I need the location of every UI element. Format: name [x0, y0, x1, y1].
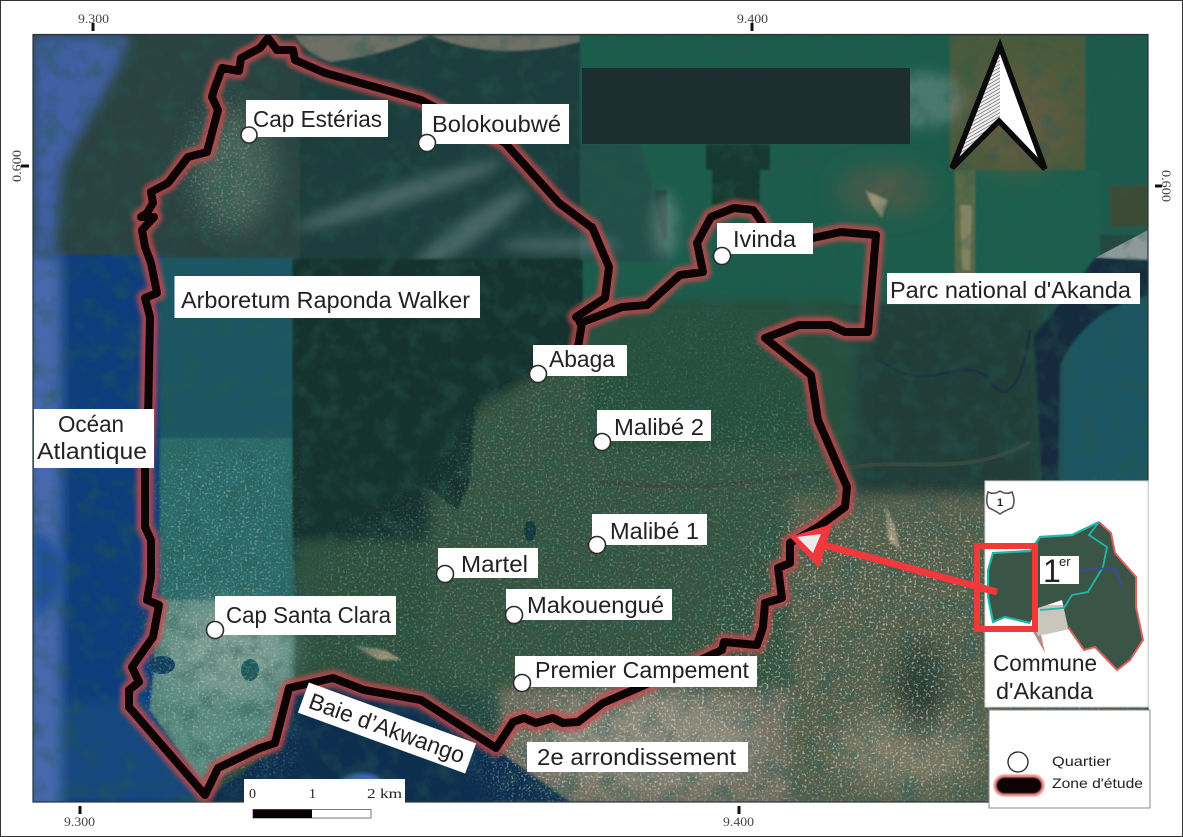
land areas: [296, 295, 1160, 815]
label: Océan Atlantique: [34, 409, 154, 468]
red selection square: [977, 546, 1035, 629]
geographic ticks and coordinates: 0.600: [9, 150, 24, 182]
label: 1er arrondissement: [1040, 553, 1079, 589]
geographic ticks and coordinates: 9.400: [723, 814, 754, 829]
legend: quartier: Quartier: [1052, 753, 1111, 769]
label: Arboretum Raponda Walker: [174, 276, 480, 318]
label: Makouengué: [506, 589, 672, 624]
label: Commune d'Akanda: d'Akanda: [996, 678, 1093, 704]
label: Premier Campement: Premier Campement: [535, 657, 750, 683]
geographic ticks and coordinates: 9.300: [64, 814, 95, 829]
land west: [150, 600, 293, 788]
label: Océan Atlantique: Océan: [58, 411, 124, 437]
label: Abaga: [530, 345, 627, 382]
label: Bolokoubwé: Bolokoubwé: [432, 111, 561, 137]
scale bar: 1: [309, 787, 316, 802]
label: Océan Atlantique: Atlantique: [37, 438, 147, 464]
label: Malibé 2: Malibé 2: [614, 414, 704, 440]
inset commune shape: [988, 522, 1143, 670]
label: Abaga: Abaga: [549, 346, 615, 372]
label: Makouengué: Makouengué: [527, 592, 664, 618]
broad tone patches: [170, 70, 1070, 785]
label: 1er arrondissement: er: [1059, 554, 1071, 569]
label: Cap Estérias: Cap Estérias: [253, 106, 382, 132]
label: Commune d'Akanda: [993, 650, 1097, 704]
scale bar: 2 km: [367, 787, 402, 802]
label: Cap Santa Clara: [206, 596, 396, 638]
lakes: [149, 656, 175, 674]
label: Ivinda: Ivinda: [733, 226, 796, 252]
label: Cap Estérias: [241, 100, 388, 143]
geographic ticks and coordinates: 9.300: [78, 11, 109, 26]
sea and coast blues: [33, 35, 130, 255]
geographic ticks and coordinates: 9.400: [737, 11, 768, 26]
geographic ticks and coordinates: 0.600: [1159, 170, 1174, 202]
study zone boundary: [129, 38, 876, 795]
scale bar: [244, 779, 405, 818]
label: Premier Campement: [514, 656, 757, 692]
label: Commune d'Akanda: Commune: [993, 650, 1097, 676]
legend: quartier: [1008, 752, 1111, 772]
icon: route shield: 1: [997, 497, 1003, 509]
label: Cap Santa Clara: Cap Santa Clara: [226, 602, 391, 628]
label: Malibé 1: [588, 514, 707, 554]
north arrow: [952, 46, 1045, 169]
label: Martel: Martel: [461, 551, 528, 577]
label: Malibé 2: [594, 410, 711, 450]
arrow: from inset to study zone: [790, 524, 997, 592]
label: Bolokoubwé: [418, 104, 569, 152]
label: Martel: [436, 548, 538, 582]
label: Parc national d'Akanda: Parc national d'Akanda: [890, 277, 1131, 303]
icon: route shield: [987, 491, 1014, 514]
label: Malibé 1: Malibé 1: [610, 518, 699, 544]
cloud streaks: [292, 72, 965, 280]
rocky shore: [295, 35, 580, 62]
dark channels and grey river: [1095, 230, 1148, 262]
label: Baie d'Akwango: Baie d’Akwango: [305, 688, 469, 768]
legend: [989, 710, 1150, 808]
label: Ivinda: [714, 223, 813, 264]
dark forest inside map: [293, 259, 580, 537]
legend: zone d'étude: Zone d'étude: [1052, 775, 1143, 791]
sand patches: [353, 190, 972, 660]
scale bar: 0: [249, 787, 256, 802]
inset: Commune d'Akanda: [977, 481, 1148, 707]
redacted dark rectangle: [582, 68, 910, 144]
label: 2e arrondissement: 2e arrondissement: [537, 744, 737, 770]
legend: zone d'étude: [995, 775, 1143, 795]
label: Arboretum Raponda Walker: Arboretum Raponda Walker: [181, 287, 470, 313]
label: 1er arrondissement: 1: [1043, 553, 1061, 589]
